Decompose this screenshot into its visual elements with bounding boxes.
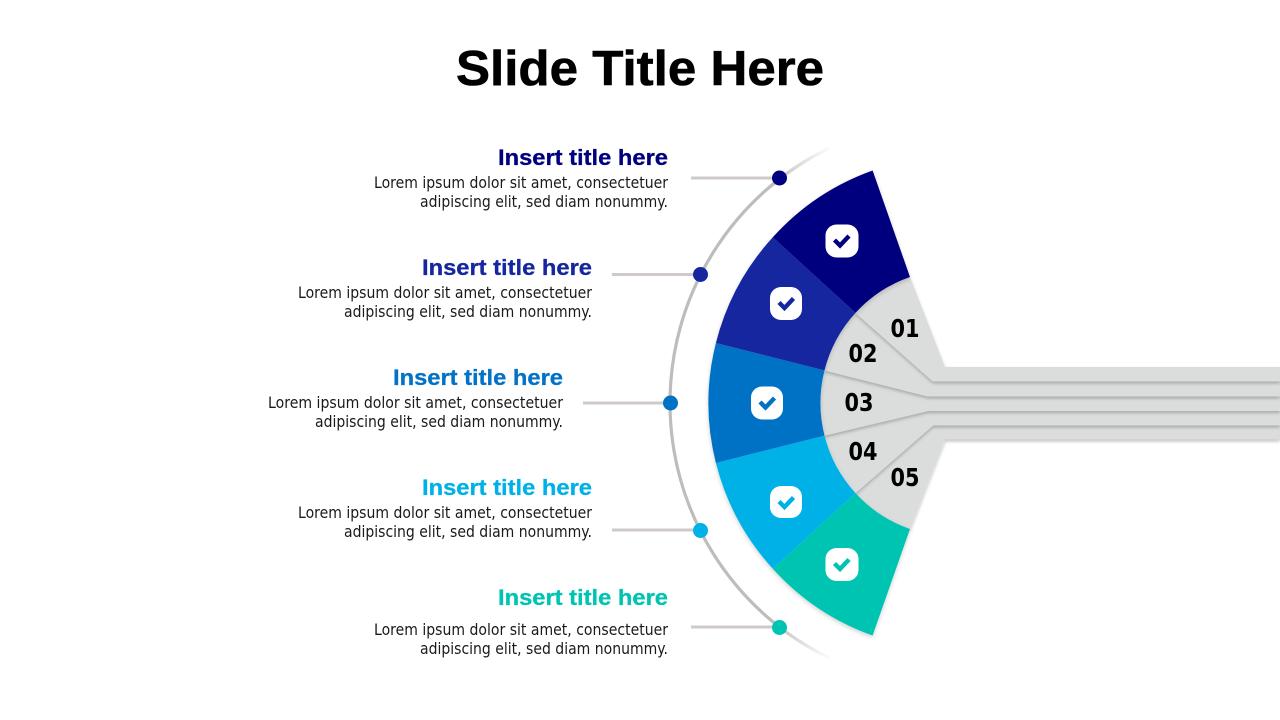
text block 3 (268, 365, 563, 431)
text block 1: adipiscing elit, sed diam nonummy. (420, 192, 668, 211)
band 02 (824, 313, 1280, 396)
icon: check 2 (770, 287, 802, 320)
sector 4: sky blue (716, 436, 856, 569)
title: Slide Title Here (456, 42, 824, 96)
text block 2: Lorem ipsum dolor sit amet, consectetuer (298, 283, 592, 302)
sector 5: teal (773, 493, 910, 636)
icon: check 1 (826, 224, 858, 258)
icon: check 4 (770, 486, 802, 518)
text block 4: Lorem ipsum dolor sit amet, consectetuer (298, 503, 592, 522)
text block 1: Insert title here (498, 145, 668, 170)
text block 4: adipiscing elit, sed diam nonummy. (344, 522, 592, 541)
sector 2: royal blue (716, 237, 856, 370)
band 03 (820, 370, 1280, 436)
grey funnel with number bands (820, 277, 1280, 529)
text block 3: adipiscing elit, sed diam nonummy. (315, 412, 563, 431)
text block 5: adipiscing elit, sed diam nonummy. (420, 639, 668, 658)
number 04: 04 (848, 437, 878, 466)
connector 5 (691, 620, 787, 635)
connector 1 (691, 170, 787, 186)
sector 1: navy (773, 170, 910, 313)
text block 5: Insert title here (498, 585, 668, 610)
band 05 (856, 426, 1280, 529)
text block 1: Lorem ipsum dolor sit amet, consectetuer (374, 173, 668, 192)
icon: check 5 (826, 548, 858, 581)
text block 3: Insert title here (393, 365, 563, 390)
text block 1 (374, 145, 668, 211)
connector 3 (583, 396, 678, 410)
text block 4 (298, 475, 592, 541)
connector 2 (612, 267, 708, 282)
sector 3: blue (708, 343, 824, 463)
band 04 (824, 411, 1280, 493)
text block 2: adipiscing elit, sed diam nonummy. (344, 302, 592, 321)
connector 4 (612, 523, 708, 538)
text block 2 (298, 255, 592, 321)
outer arc (670, 148, 830, 658)
number 01: 01 (890, 314, 920, 343)
text block 2: Insert title here (422, 255, 592, 280)
number 03: 03 (844, 388, 874, 417)
coloured sectors (708, 170, 910, 636)
number 02: 02 (848, 339, 878, 368)
number 05: 05 (890, 463, 920, 492)
text block 3: Lorem ipsum dolor sit amet, consectetuer (268, 393, 563, 412)
band 01 (856, 277, 1280, 382)
text block 5 (374, 585, 668, 658)
icon: check 3 (751, 386, 783, 420)
text block 4: Insert title here (422, 475, 592, 500)
text block 5: Lorem ipsum dolor sit amet, consectetuer (374, 620, 668, 639)
